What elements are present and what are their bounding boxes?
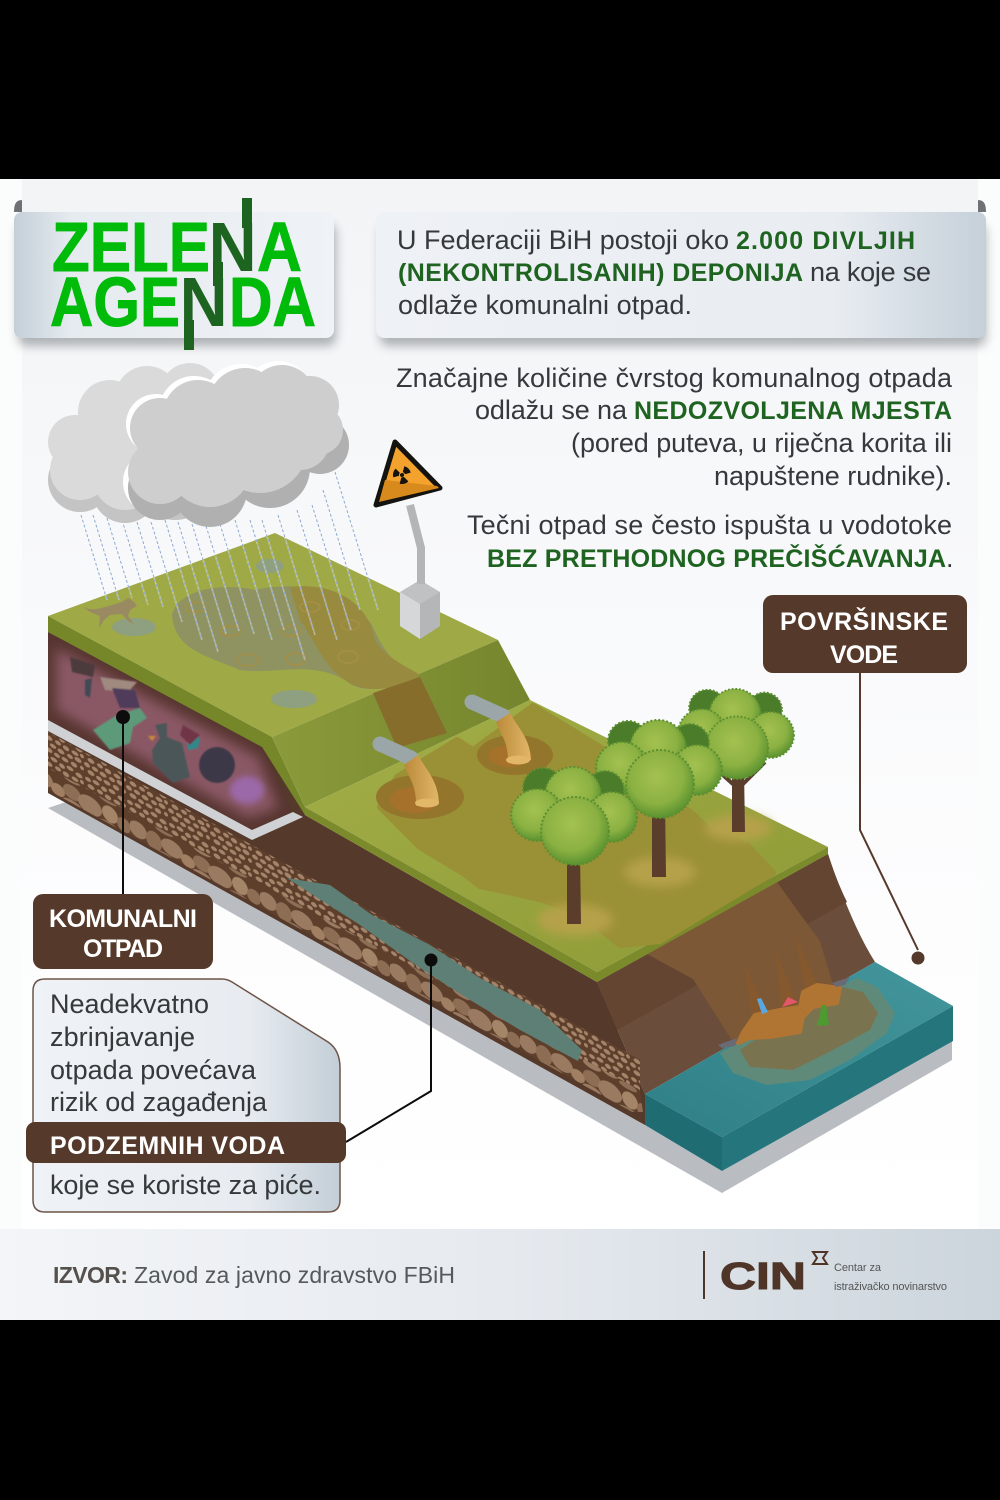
text block: illegal sites: (pored puteva, u riječna korita ili [571,428,952,458]
text block: illegal sites: Značajne količine čvrstog komunalnog otpada [396,363,953,393]
right soil slope [597,854,875,1094]
title: Zelena Agenda: N [209,208,257,286]
text block: intro: odlaže komunalni otpad. [398,290,692,320]
callout: groundwater risk: otpada povećava [50,1055,257,1085]
callout: groundwater risk [26,979,346,1212]
soil upper band [597,854,847,1030]
inner panel background [22,179,978,1229]
text block: liquid waste: Tečni otpad se često ispušta u vodotoke [467,510,952,540]
rain [81,472,378,660]
liner [48,720,303,840]
text block: illegal sites: napuštene rudnike). [714,461,952,491]
waste bags [70,657,264,804]
text block: illegal sites: NEDOZVOLJENA MJESTA [634,397,952,425]
icon: warning sign on post [376,442,440,639]
upper pollution [172,586,420,689]
source: IZVOR: [53,1262,128,1288]
title: Zelena Agenda: AGE [50,263,180,341]
label: surface water [763,595,967,673]
gravel layer [48,732,643,1112]
icon: tree 1 [511,767,637,924]
text block: intro: (NEKONTROLISANIH) DEPONIJA [398,259,803,287]
title: Zelena Agenda: A [257,208,302,286]
icon: back cloud [48,363,225,523]
water body [645,962,953,1171]
slope pollution [373,677,447,748]
ground shadow [48,802,952,1193]
logo: CIN: CIN [720,1256,806,1298]
callout: groundwater risk: PODZEMNIH VODA [50,1132,285,1160]
panel: footer [0,1229,1000,1320]
text block: illegal sites: odlažu se na [475,395,628,425]
icon: pipes with outflow [380,702,531,808]
front soil side [48,632,645,1125]
page background [0,179,1000,1320]
slope face [272,640,530,807]
panel: intro ribbon [376,212,986,346]
leader line: groundwater [346,954,438,1142]
groundwater [287,878,582,1061]
text block: intro: U Federaciji BiH postoji oko [397,225,729,255]
callout: groundwater risk: zbrinjavanje [50,1022,195,1052]
icon: wolf [83,598,137,628]
text block: intro: 2.000 DIVLJIH [736,227,915,255]
logo: CIN [703,1251,947,1299]
floating waste [738,985,840,1043]
puddles [112,559,317,708]
icon: tree 2 [596,720,722,877]
text block: liquid waste [467,510,954,573]
lower surface [305,700,828,972]
label: municipal waste: KOMUNALNI [49,905,197,933]
logo: CIN: istraživačko novinarstvo [834,1281,947,1293]
icon: front cloud [123,361,349,527]
title: Zelena Agenda: N [180,263,228,341]
callout: groundwater risk: koje se koriste za piće. [50,1170,321,1200]
leader line: surface water [860,673,924,964]
callout: groundwater risk: Neadekvatno [50,989,209,1019]
rings [185,602,359,666]
text block: liquid waste: . [946,543,954,573]
text block: illegal sites [396,363,953,491]
polluted water [720,978,895,1085]
pollution on soil slope [647,882,833,1042]
label: municipal waste: OTPAD [83,935,163,963]
icon: tree 3 [678,689,794,832]
title: Zelena Agenda: DA [229,263,316,341]
callout: groundwater risk: rizik od zagađenja [50,1087,268,1117]
text block: intro: na koje se [810,257,931,287]
soil streaks [745,935,820,1022]
upper surface edge [48,616,305,815]
bottom band [0,1320,1000,1500]
upper surface [48,533,498,737]
ribbon curls [14,200,986,212]
source: Zavod za javno zdravstvo FBiH [134,1262,455,1288]
pools at pipes [376,735,553,819]
leader line: municipal waste [116,710,130,894]
panel: title ribbon [14,212,336,346]
isometric terrain [48,533,875,1125]
landfill cross-section [48,632,292,830]
label: surface water: POVRŠINSKE [780,606,948,636]
lower surface edge [305,807,828,982]
label: municipal waste [33,894,213,969]
text block: liquid waste: BEZ PRETHODNOG PREČIŠĆAVANJA [487,543,946,573]
title: Zelena Agenda: ZELE [52,208,210,286]
logo: CIN: Centar za [834,1262,882,1274]
lower pollution [380,706,773,945]
text block: intro [397,225,931,320]
title: Zelena Agenda [50,198,316,350]
label: surface water: VODE [830,641,898,669]
tree ground stains [537,815,772,936]
